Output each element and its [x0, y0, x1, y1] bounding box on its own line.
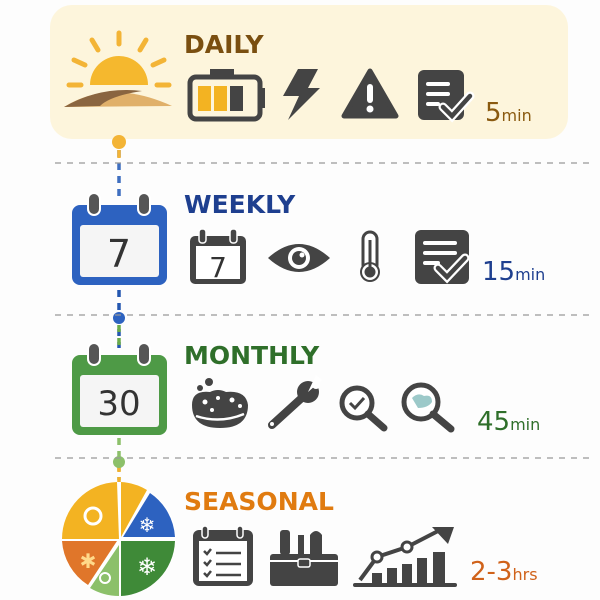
- time: daily: 5min: [485, 98, 532, 128]
- icon: eye: [268, 244, 330, 272]
- panel: daily background: [50, 5, 568, 139]
- icon: seasonal pie: ❄: [139, 515, 155, 537]
- icon: weekly document: [415, 230, 469, 284]
- icon: small calendar: [190, 229, 246, 284]
- icon: warning: [344, 71, 396, 116]
- icon: seasonal pie: ❄: [137, 554, 157, 581]
- icon: lightning: [283, 69, 320, 120]
- icon: growth chart: [355, 527, 455, 585]
- icon: weekly calendar: 7: [107, 232, 131, 276]
- icon: checked document: [418, 70, 470, 120]
- timeline connector: [112, 135, 126, 482]
- icon: sponge: [192, 378, 248, 428]
- icon: magnifier map: [404, 385, 451, 429]
- icon: checklist calendar: [193, 526, 253, 586]
- icon: toolbox: [270, 530, 338, 586]
- icon: monthly calendar: [72, 343, 167, 435]
- icon: battery: [190, 69, 265, 119]
- icon: thermometer: [360, 232, 380, 282]
- icon: small calendar: 7: [209, 251, 227, 284]
- icon: wrench: [270, 375, 322, 426]
- icon: magnifier check: [342, 388, 384, 428]
- heading: daily: DAILY: [184, 30, 264, 59]
- dividers: [55, 163, 590, 458]
- time: seasonal: 2-3hrs: [470, 557, 538, 587]
- icon: seasonal pie: [62, 482, 176, 596]
- icon: sunrise: [64, 33, 172, 107]
- heading: seasonal: SEASONAL: [184, 487, 334, 516]
- icon: seasonal pie: ✱: [80, 551, 96, 573]
- icon: monthly calendar: 30: [97, 384, 141, 424]
- time: weekly: 15min: [482, 257, 545, 287]
- icon: weekly calendar: [72, 193, 167, 285]
- heading: monthly: MONTHLY: [184, 341, 320, 370]
- heading: weekly: WEEKLY: [184, 190, 296, 219]
- time: monthly: 45min: [477, 407, 540, 437]
